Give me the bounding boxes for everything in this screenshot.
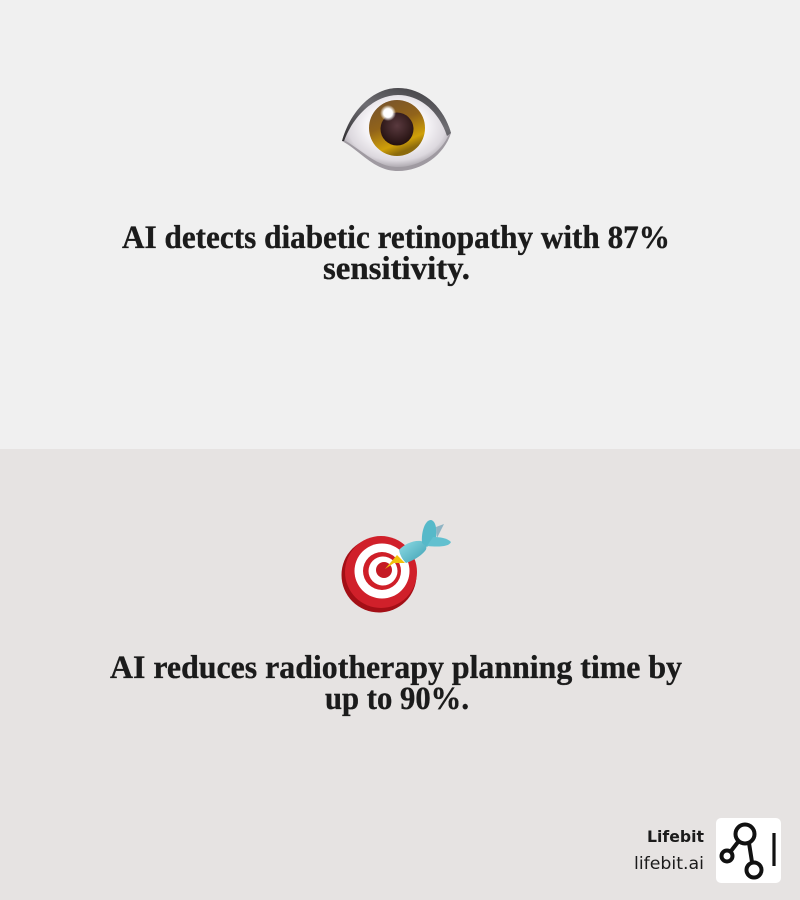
icon: Lifebit logo bbox=[716, 818, 781, 883]
brand url: lifebit.ai bbox=[634, 854, 704, 874]
icon: eye bbox=[342, 88, 451, 171]
heading: eye statistic: AI detects diabetic retinopathy with 87% bbox=[122, 220, 670, 256]
heading: target statistic: up to 90%. bbox=[325, 681, 469, 717]
heading: eye statistic: sensitivity. bbox=[323, 251, 470, 287]
heading: target statistic: AI reduces radiotherapy planning time by bbox=[110, 650, 682, 686]
panel: top background bbox=[0, 0, 800, 449]
panel: bottom background bbox=[0, 449, 800, 900]
brand name: Lifebit bbox=[647, 827, 704, 846]
icon: dart and target bbox=[342, 520, 451, 612]
